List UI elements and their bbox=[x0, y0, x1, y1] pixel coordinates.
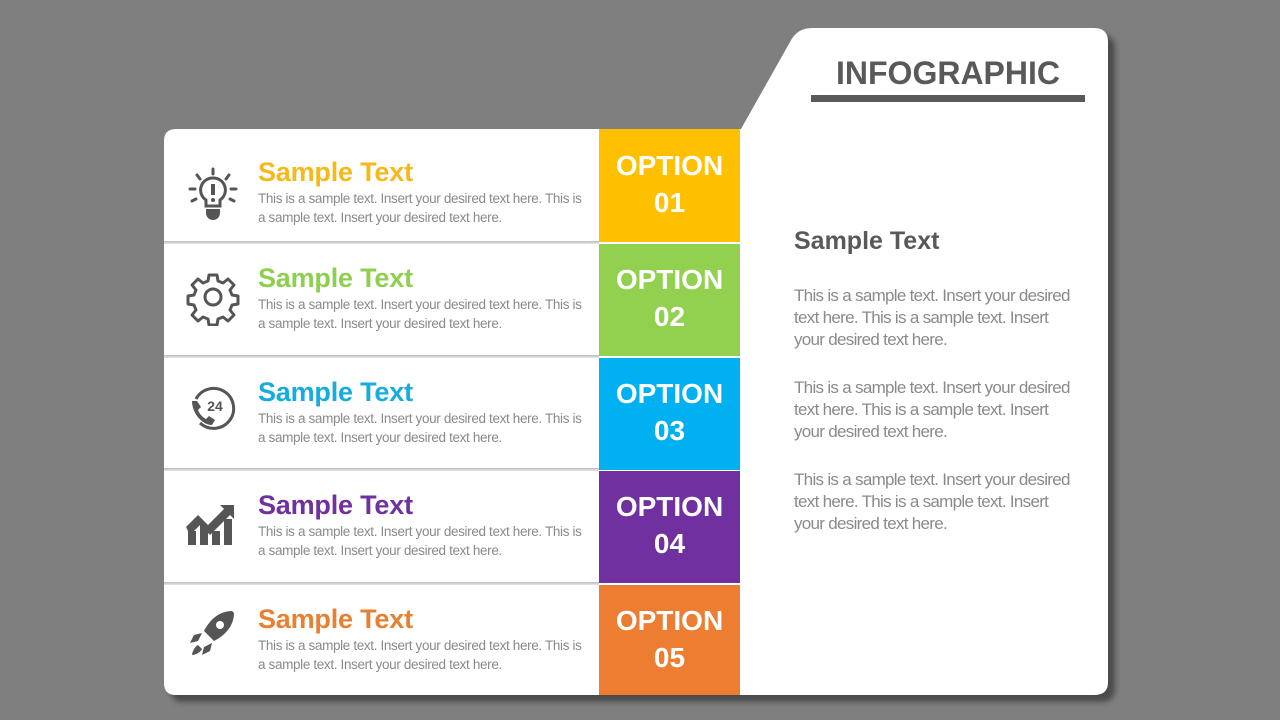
row 1 bbox=[188, 129, 740, 242]
text block: right description: This is a sample text. Insert your desired text here. This is a sample text. Insert your desired text here. bbox=[794, 470, 1070, 533]
text block: right description: Sample Text bbox=[794, 227, 939, 255]
row 4: This is a sample text. Insert your desired text here. This is a sample text. Insert your desired text here. bbox=[258, 524, 582, 558]
title underline bbox=[811, 95, 1085, 102]
row 2: This is a sample text. Insert your desired text here. This is a sample text. Insert your desired text here. bbox=[258, 297, 582, 331]
option 02 bbox=[599, 244, 740, 356]
row 3: Sample Text bbox=[258, 377, 413, 407]
icon: lightbulb bbox=[188, 168, 238, 220]
option 02: OPTION bbox=[616, 264, 723, 295]
row 3 bbox=[192, 358, 740, 470]
text block: right description: This is a sample text. Insert your desired text here. This is a sample text. Insert your desired text here. bbox=[794, 286, 1070, 349]
option 02: 02 bbox=[654, 301, 685, 332]
icon: gear bbox=[186, 274, 240, 326]
icon: growth chart bbox=[186, 505, 234, 545]
row 4 bbox=[186, 471, 740, 583]
row 5 bbox=[190, 585, 740, 695]
row 1: Sample Text bbox=[258, 157, 413, 187]
row 2 bbox=[186, 244, 740, 356]
icon: rocket bbox=[190, 611, 234, 655]
text block: right description: This is a sample text. Insert your desired text here. This is a sample text. Insert your desired text here. bbox=[794, 378, 1070, 441]
option 03 bbox=[599, 358, 740, 470]
title: INFOGRAPHIC bbox=[836, 55, 1060, 91]
row 5: This is a sample text. Insert your desired text here. This is a sample text. Insert your desired text here. bbox=[258, 638, 582, 672]
option 04: 04 bbox=[654, 528, 685, 559]
option 01: OPTION bbox=[616, 150, 723, 181]
icon: 24h phone bbox=[192, 386, 236, 430]
text block: right description bbox=[794, 227, 1070, 533]
icon: 24h phone: 24 bbox=[207, 398, 223, 414]
row 1: This is a sample text. Insert your desired text here. This is a sample text. Insert your desired text here. bbox=[258, 191, 582, 225]
option 03: OPTION bbox=[616, 378, 723, 409]
option 04: OPTION bbox=[616, 491, 723, 522]
option 05: 05 bbox=[654, 642, 685, 673]
row 4: Sample Text bbox=[258, 490, 413, 520]
option 01: 01 bbox=[654, 187, 685, 218]
option 05 bbox=[599, 585, 740, 695]
row 3: This is a sample text. Insert your desired text here. This is a sample text. Insert your desired text here. bbox=[258, 411, 582, 445]
option 01 bbox=[599, 129, 740, 242]
row 2: Sample Text bbox=[258, 263, 413, 293]
option 05: OPTION bbox=[616, 605, 723, 636]
option 04 bbox=[599, 471, 740, 583]
row 5: Sample Text bbox=[258, 604, 413, 634]
option 03: 03 bbox=[654, 415, 685, 446]
